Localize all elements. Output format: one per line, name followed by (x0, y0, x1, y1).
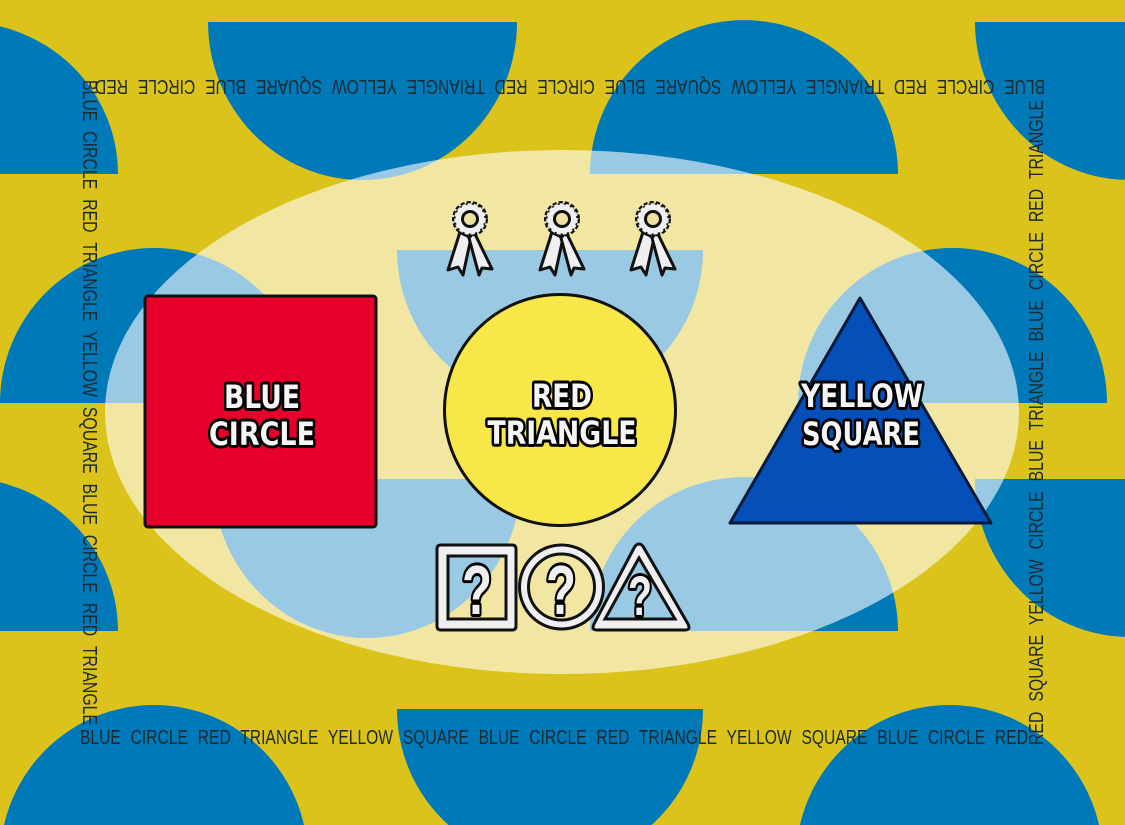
icon: mystery shapes row (437, 544, 689, 630)
yellow circle labelled red triangle: TRIANGLE (488, 414, 636, 452)
yellow circle labelled red triangle (444, 294, 676, 526)
blue triangle labelled yellow square: YELLOW (800, 377, 923, 415)
icon: circle with question mark: ? (546, 551, 576, 629)
blue triangle labelled yellow square (730, 298, 991, 523)
icon: triangle with question mark (593, 544, 689, 630)
icon: ribbon 3 (631, 203, 675, 275)
icon: square with question mark: ? (462, 551, 492, 629)
red square labelled blue circle: CIRCLE (209, 415, 315, 453)
central pale ellipse (105, 150, 1019, 674)
red square labelled blue circle: BLUE (224, 378, 300, 416)
yellow circle labelled red triangle: RED (532, 377, 592, 415)
icon: triangle with question mark: ? (628, 564, 652, 627)
icon: ribbon 1 (448, 203, 492, 275)
icon: circle with question mark (520, 545, 604, 629)
icon: square with question mark (437, 545, 516, 630)
blue triangle labelled yellow square: SQUARE (802, 415, 920, 453)
red square labelled blue circle (145, 296, 376, 527)
icon: ribbon 2 (540, 203, 584, 275)
icon: three rosette ribbons (448, 203, 675, 275)
